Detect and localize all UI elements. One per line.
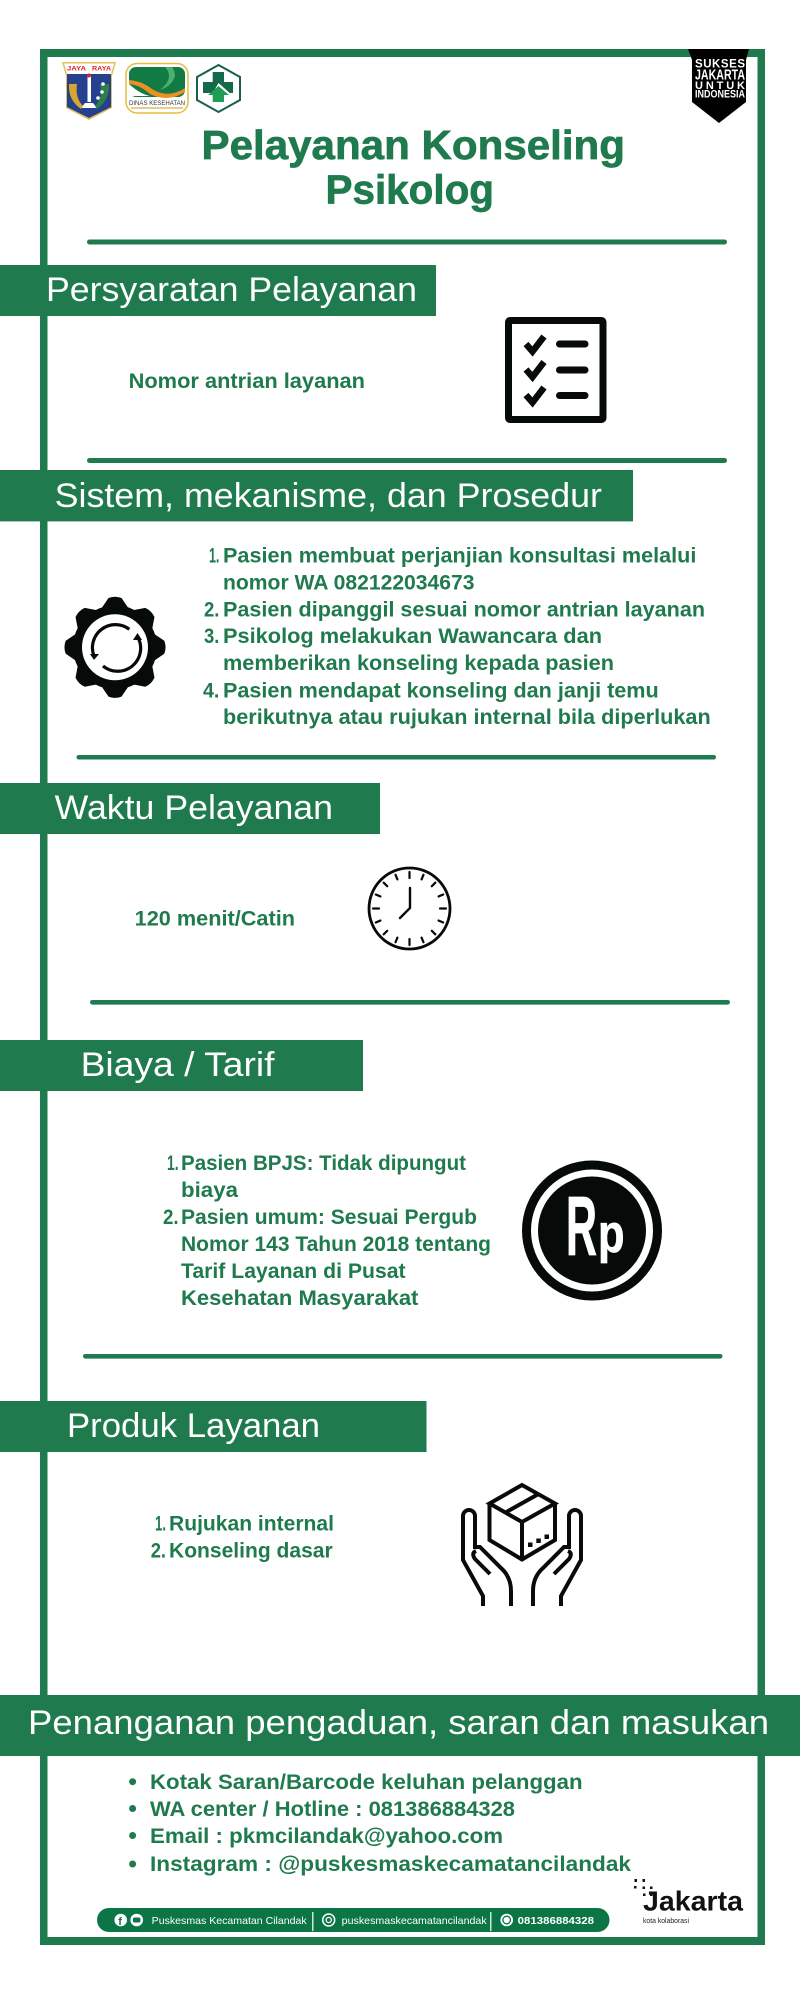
- numbered list: procedure: Pasien membuat perjanjian konsultasi melalui: [223, 544, 696, 568]
- icon: Dinas Kesehatan logo: DINAS KESEHATAN: [129, 100, 185, 107]
- heading: Produk Layanan: [0, 1401, 426, 1452]
- panel: Produk Layanan: [0, 1401, 581, 1606]
- heading: Sistem, mekanisme, dan Prosedur: Sistem, mekanisme, dan Prosedur: [55, 477, 602, 515]
- bullet list: contact channels: Email : pkmcilandak@yahoo.com: [150, 1824, 503, 1848]
- numbered list: fees: Pasien BPJS: Tidak dipungut: [181, 1151, 466, 1175]
- icon: rupiah coin: p: [598, 1204, 624, 1264]
- heading: Persyaratan Pelayanan: [0, 265, 436, 316]
- text: facebook name: Puskesmas Kecamatan Cilandak: [152, 1915, 307, 1927]
- heading: Waktu Pelayanan: Waktu Pelayanan: [55, 789, 333, 827]
- panel: Biaya / Tarif: [0, 1040, 658, 1310]
- bullet list: contact channels: Instagram : @puskesmaskecamatancilandak: [150, 1852, 631, 1876]
- numbered list: fees: Nomor 143 Tahun 2018 tentang: [181, 1232, 491, 1256]
- numbered list: procedure: 3.: [204, 624, 219, 648]
- text: phone: 081386884328: [518, 1915, 594, 1927]
- icon: gear with cycle arrows: [64, 597, 166, 698]
- icon: rupiah coin: [526, 1165, 658, 1296]
- icon: rupiah coin: R: [566, 1179, 597, 1273]
- icon: Jakarta coat of arms: RAYA: [92, 66, 111, 72]
- numbered list: products: [151, 1512, 334, 1562]
- heading: Penanganan pengaduan, saran dan masukan: Penanganan pengaduan, saran dan masukan: [28, 1704, 769, 1742]
- title: [202, 122, 625, 213]
- numbered list: products: 2.: [151, 1538, 166, 1562]
- text: instagram name: puskesmaskecamatancilandak: [342, 1915, 487, 1927]
- numbered list: procedure: 2.: [204, 597, 219, 621]
- numbered list: fees: 2.: [163, 1205, 179, 1229]
- badge: Sukses Jakarta untuk Indonesia: UNTUK: [695, 80, 745, 92]
- numbered list: fees: [163, 1151, 491, 1310]
- heading: Waktu Pelayanan: [0, 783, 380, 834]
- title: Pelayanan Konseling: [202, 122, 625, 168]
- heading: Persyaratan Pelayanan: Persyaratan Pelayanan: [46, 271, 417, 309]
- icon: facebook: f: [118, 1916, 122, 1928]
- icon: facebook: [114, 1914, 127, 1928]
- badge: Sukses Jakarta untuk Indonesia: INDONESIA: [695, 88, 745, 100]
- icon: youtube: [130, 1914, 143, 1926]
- logo: Jakarta kota kolaborasi: Jakarta: [643, 1886, 743, 1917]
- icon: Puskesmas hexagon: [197, 65, 240, 112]
- numbered list: procedure: memberikan konseling kepada pasien: [223, 651, 614, 675]
- numbered list: procedure: Pasien mendapat konseling dan janji temu: [223, 678, 659, 702]
- bullet list: contact channels: Kotak Saran/Barcode keluhan pelanggan: [150, 1770, 583, 1794]
- numbered list: products: Konseling dasar: [169, 1538, 333, 1562]
- panel: Penanganan pengaduan: [0, 1695, 800, 1876]
- numbered list: procedure: Pasien dipanggil sesuai nomor antrian layanan: [223, 597, 705, 621]
- icon: instagram: [323, 1914, 335, 1926]
- heading: Biaya / Tarif: [0, 1040, 363, 1091]
- heading: Penanganan pengaduan, saran dan masukan: [0, 1695, 800, 1756]
- panel: Sistem, mekanisme, dan Prosedur: [0, 470, 711, 729]
- text: requirement: Nomor antrian layanan: [129, 369, 365, 393]
- bullet list: contact channels: WA center / Hotline : 081386884328: [150, 1797, 515, 1821]
- numbered list: fees: Kesehatan Masyarakat: [181, 1286, 418, 1310]
- numbered list: procedure: 1.: [209, 544, 219, 568]
- heading: Biaya / Tarif: Biaya / Tarif: [81, 1046, 275, 1084]
- numbered list: fees: Pasien umum: Sesuai Pergub: [181, 1205, 477, 1229]
- icon: checklist: [508, 320, 603, 420]
- numbered list: procedure: Psikolog melakukan Wawancara dan: [223, 624, 602, 648]
- numbered list: fees: 1.: [167, 1151, 179, 1175]
- icon: Dinas Kesehatan logo: [126, 64, 188, 113]
- numbered list: procedure: 4.: [203, 678, 219, 702]
- numbered list: fees: biaya: [181, 1178, 239, 1202]
- footer social pill: [97, 1908, 610, 1932]
- numbered list: fees: Tarif Layanan di Pusat: [181, 1259, 406, 1283]
- numbered list: products: 1.: [155, 1512, 166, 1536]
- heading: Sistem, mekanisme, dan Prosedur: [0, 470, 633, 521]
- numbered list: procedure: [203, 544, 711, 729]
- icon: Jakarta coat of arms: JAYA: [67, 66, 86, 72]
- text: service time: 120 menit/Catin: [135, 906, 295, 930]
- icon: Jakarta coat of arms: [62, 62, 116, 120]
- numbered list: products: Rujukan internal: [169, 1512, 334, 1536]
- icon: whatsapp: [500, 1914, 513, 1926]
- icon: clock: [369, 868, 450, 949]
- numbered list: procedure: berikutnya atau rujukan internal bila diperlukan: [223, 705, 711, 729]
- logo: Jakarta kota kolaborasi: kota kolaborasi: [643, 1918, 689, 1925]
- numbered list: procedure: nomor WA 082122034673: [223, 570, 475, 594]
- panel: Waktu Pelayanan: [0, 783, 450, 949]
- icon: hands holding box: [463, 1485, 581, 1606]
- logos row: [62, 62, 240, 120]
- panel: Persyaratan Pelayanan: [0, 265, 603, 420]
- bullet list: contact channels: [129, 1770, 631, 1876]
- title: Psikolog: [326, 167, 494, 213]
- logo: Jakarta kota kolaborasi: [634, 1879, 743, 1925]
- badge: Sukses Jakarta untuk Indonesia: JAKARTA: [695, 68, 745, 84]
- badge: Sukses Jakarta untuk Indonesia: [688, 49, 749, 123]
- badge: Sukses Jakarta untuk Indonesia: SUKSES: [695, 58, 745, 70]
- heading: Produk Layanan: Produk Layanan: [67, 1407, 320, 1445]
